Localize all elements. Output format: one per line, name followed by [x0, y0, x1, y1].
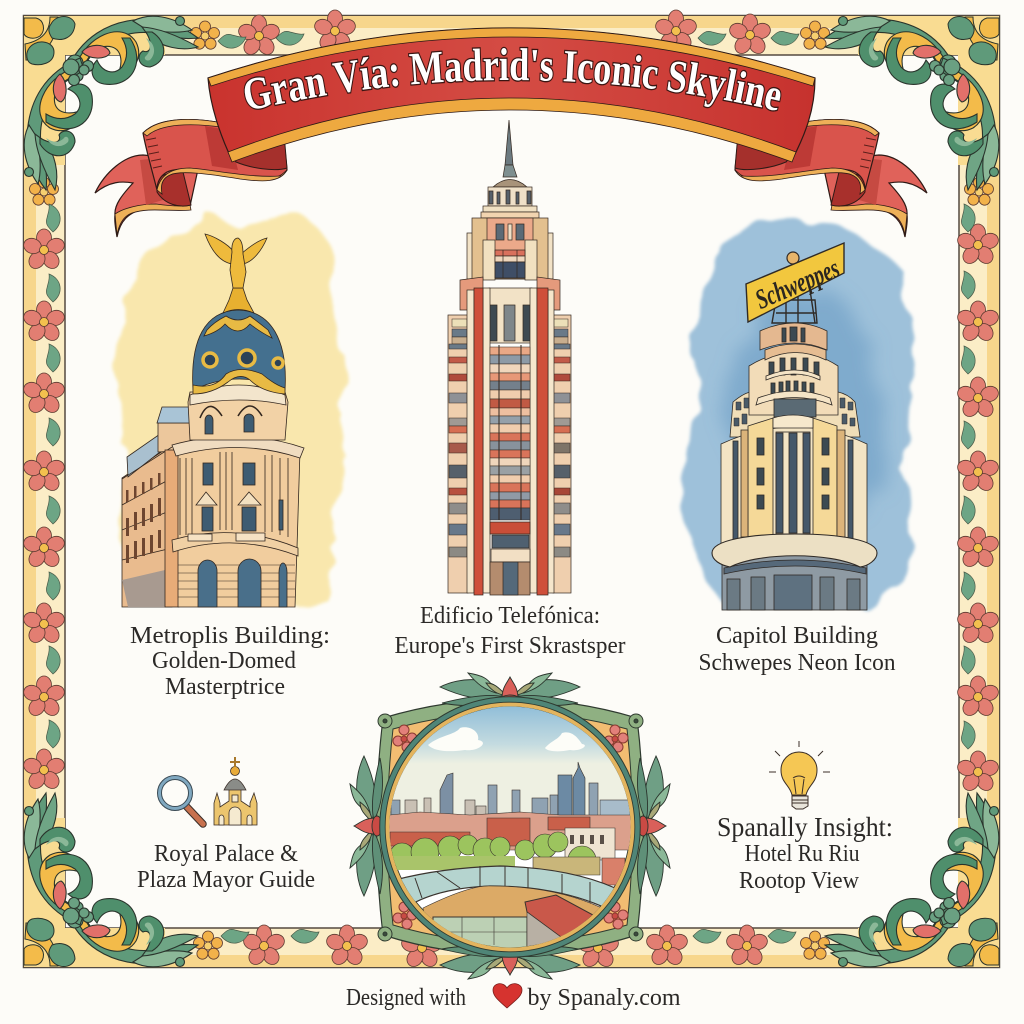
tier middle	[749, 352, 838, 415]
panel: rooftop view medallion	[350, 673, 670, 979]
shoulder tier	[730, 392, 860, 437]
pier	[165, 450, 179, 607]
title text: Gran Vía: Madrid's Iconic Skyline	[244, 46, 782, 112]
corner knobs	[378, 714, 643, 941]
icon: light bulb	[769, 741, 830, 809]
text: Metropolis caption: Golden-Domed	[152, 647, 296, 674]
wing base shadow	[122, 570, 165, 607]
footer credit	[346, 984, 680, 1011]
ribbon tail right	[735, 87, 927, 237]
dome	[193, 310, 285, 390]
spire	[505, 120, 513, 165]
statue: winged figure	[205, 234, 267, 288]
wing rows	[449, 319, 570, 557]
central window rows	[490, 347, 530, 520]
red rooftops	[380, 812, 640, 850]
text: Telefónica caption: Europe's First Skrastsper	[394, 632, 626, 659]
cream piers	[467, 290, 474, 593]
wing windows	[126, 473, 161, 563]
corner motifs	[393, 725, 628, 929]
upper body	[489, 288, 532, 343]
cornice	[172, 436, 304, 458]
banner top edge	[208, 28, 815, 86]
pediments and lower windows	[196, 492, 261, 505]
crown dome	[493, 180, 527, 187]
rustication	[178, 565, 295, 597]
stepped tiers	[483, 206, 537, 212]
text: Metropolis caption: Masterptrice	[165, 673, 285, 700]
text: Spanally Insight	[717, 812, 893, 894]
text: Capitol caption: Schwepes Neon Icon	[698, 649, 896, 676]
distant towers	[390, 762, 630, 820]
upper windows	[203, 463, 213, 485]
tier windows	[769, 358, 819, 394]
text: Spanally Insight: Rootop View	[739, 867, 859, 894]
rings	[383, 700, 637, 954]
footer credit: Designed with	[346, 984, 466, 1011]
dome ornaments	[204, 316, 272, 338]
sign text: Schweppes	[751, 253, 844, 316]
text: Metropolis caption: Metroplis Building:	[130, 622, 330, 649]
columns	[180, 452, 288, 537]
icon: palace	[214, 757, 257, 825]
sky	[380, 705, 640, 845]
panel: Edificio Telefónica illustration	[448, 120, 571, 595]
text: Spanally Insight: Hotel Ru Riu	[744, 840, 860, 867]
right wing	[553, 315, 571, 593]
tier top	[760, 323, 827, 350]
wash darker patch	[729, 290, 890, 516]
text: Spanally Insight: Spanally Insight:	[717, 812, 893, 842]
lantern	[488, 187, 532, 206]
terrace floor	[423, 886, 610, 945]
text: Telefónica caption: Edificio Telefónica:	[420, 602, 600, 629]
canopy	[712, 534, 877, 567]
side windows	[733, 441, 738, 540]
left wing wall	[122, 445, 172, 607]
base grey floor	[722, 555, 867, 610]
left wing	[448, 315, 468, 593]
frame inner corners	[388, 712, 632, 942]
scaffold	[772, 290, 817, 323]
text: Capitol caption	[698, 622, 896, 676]
drum windows	[205, 414, 254, 434]
icon: magnifying glass	[160, 778, 203, 824]
medallion frame	[376, 699, 644, 955]
lower railing	[433, 917, 527, 949]
trees	[392, 832, 596, 865]
banner main band	[208, 28, 815, 160]
tiled roof	[525, 895, 593, 940]
banner bottom edge	[228, 98, 796, 162]
central windows	[776, 432, 810, 534]
panel: Capitol Building illustration	[688, 217, 914, 610]
icon: heart	[493, 984, 522, 1008]
text: Metropolis caption	[130, 622, 330, 700]
text: Capitol caption: Capitol Building	[716, 622, 878, 649]
red stripes	[474, 288, 483, 595]
leaf sprays	[350, 673, 670, 979]
wing roof	[127, 434, 160, 477]
watercolor wash yellow	[120, 212, 347, 600]
tower entrance	[490, 522, 530, 534]
glass railing	[395, 866, 615, 910]
text: Royal Palace caption: Royal Palace &	[154, 840, 298, 867]
drum	[188, 392, 288, 440]
panel: Metropolis Building illustration	[120, 212, 347, 607]
text: Royal Palace caption: Plaza Mayor Guide	[137, 866, 315, 893]
Schweppes sign	[746, 243, 844, 322]
clouds	[428, 727, 585, 751]
painted city view	[380, 705, 640, 950]
watercolor wash blue	[688, 217, 914, 602]
statue base	[223, 288, 254, 313]
main facade	[178, 440, 300, 607]
text: Royal Palace caption	[137, 840, 315, 893]
arched windows	[198, 559, 287, 607]
main drum	[721, 427, 867, 543]
text: Telefónica caption	[394, 602, 626, 659]
footer credit: by Spanaly.com	[528, 984, 680, 1011]
ribbon tail left	[95, 87, 287, 237]
yellow panels	[748, 418, 773, 537]
knob	[787, 252, 799, 264]
title banner	[94, 27, 928, 278]
balcony	[172, 533, 298, 556]
